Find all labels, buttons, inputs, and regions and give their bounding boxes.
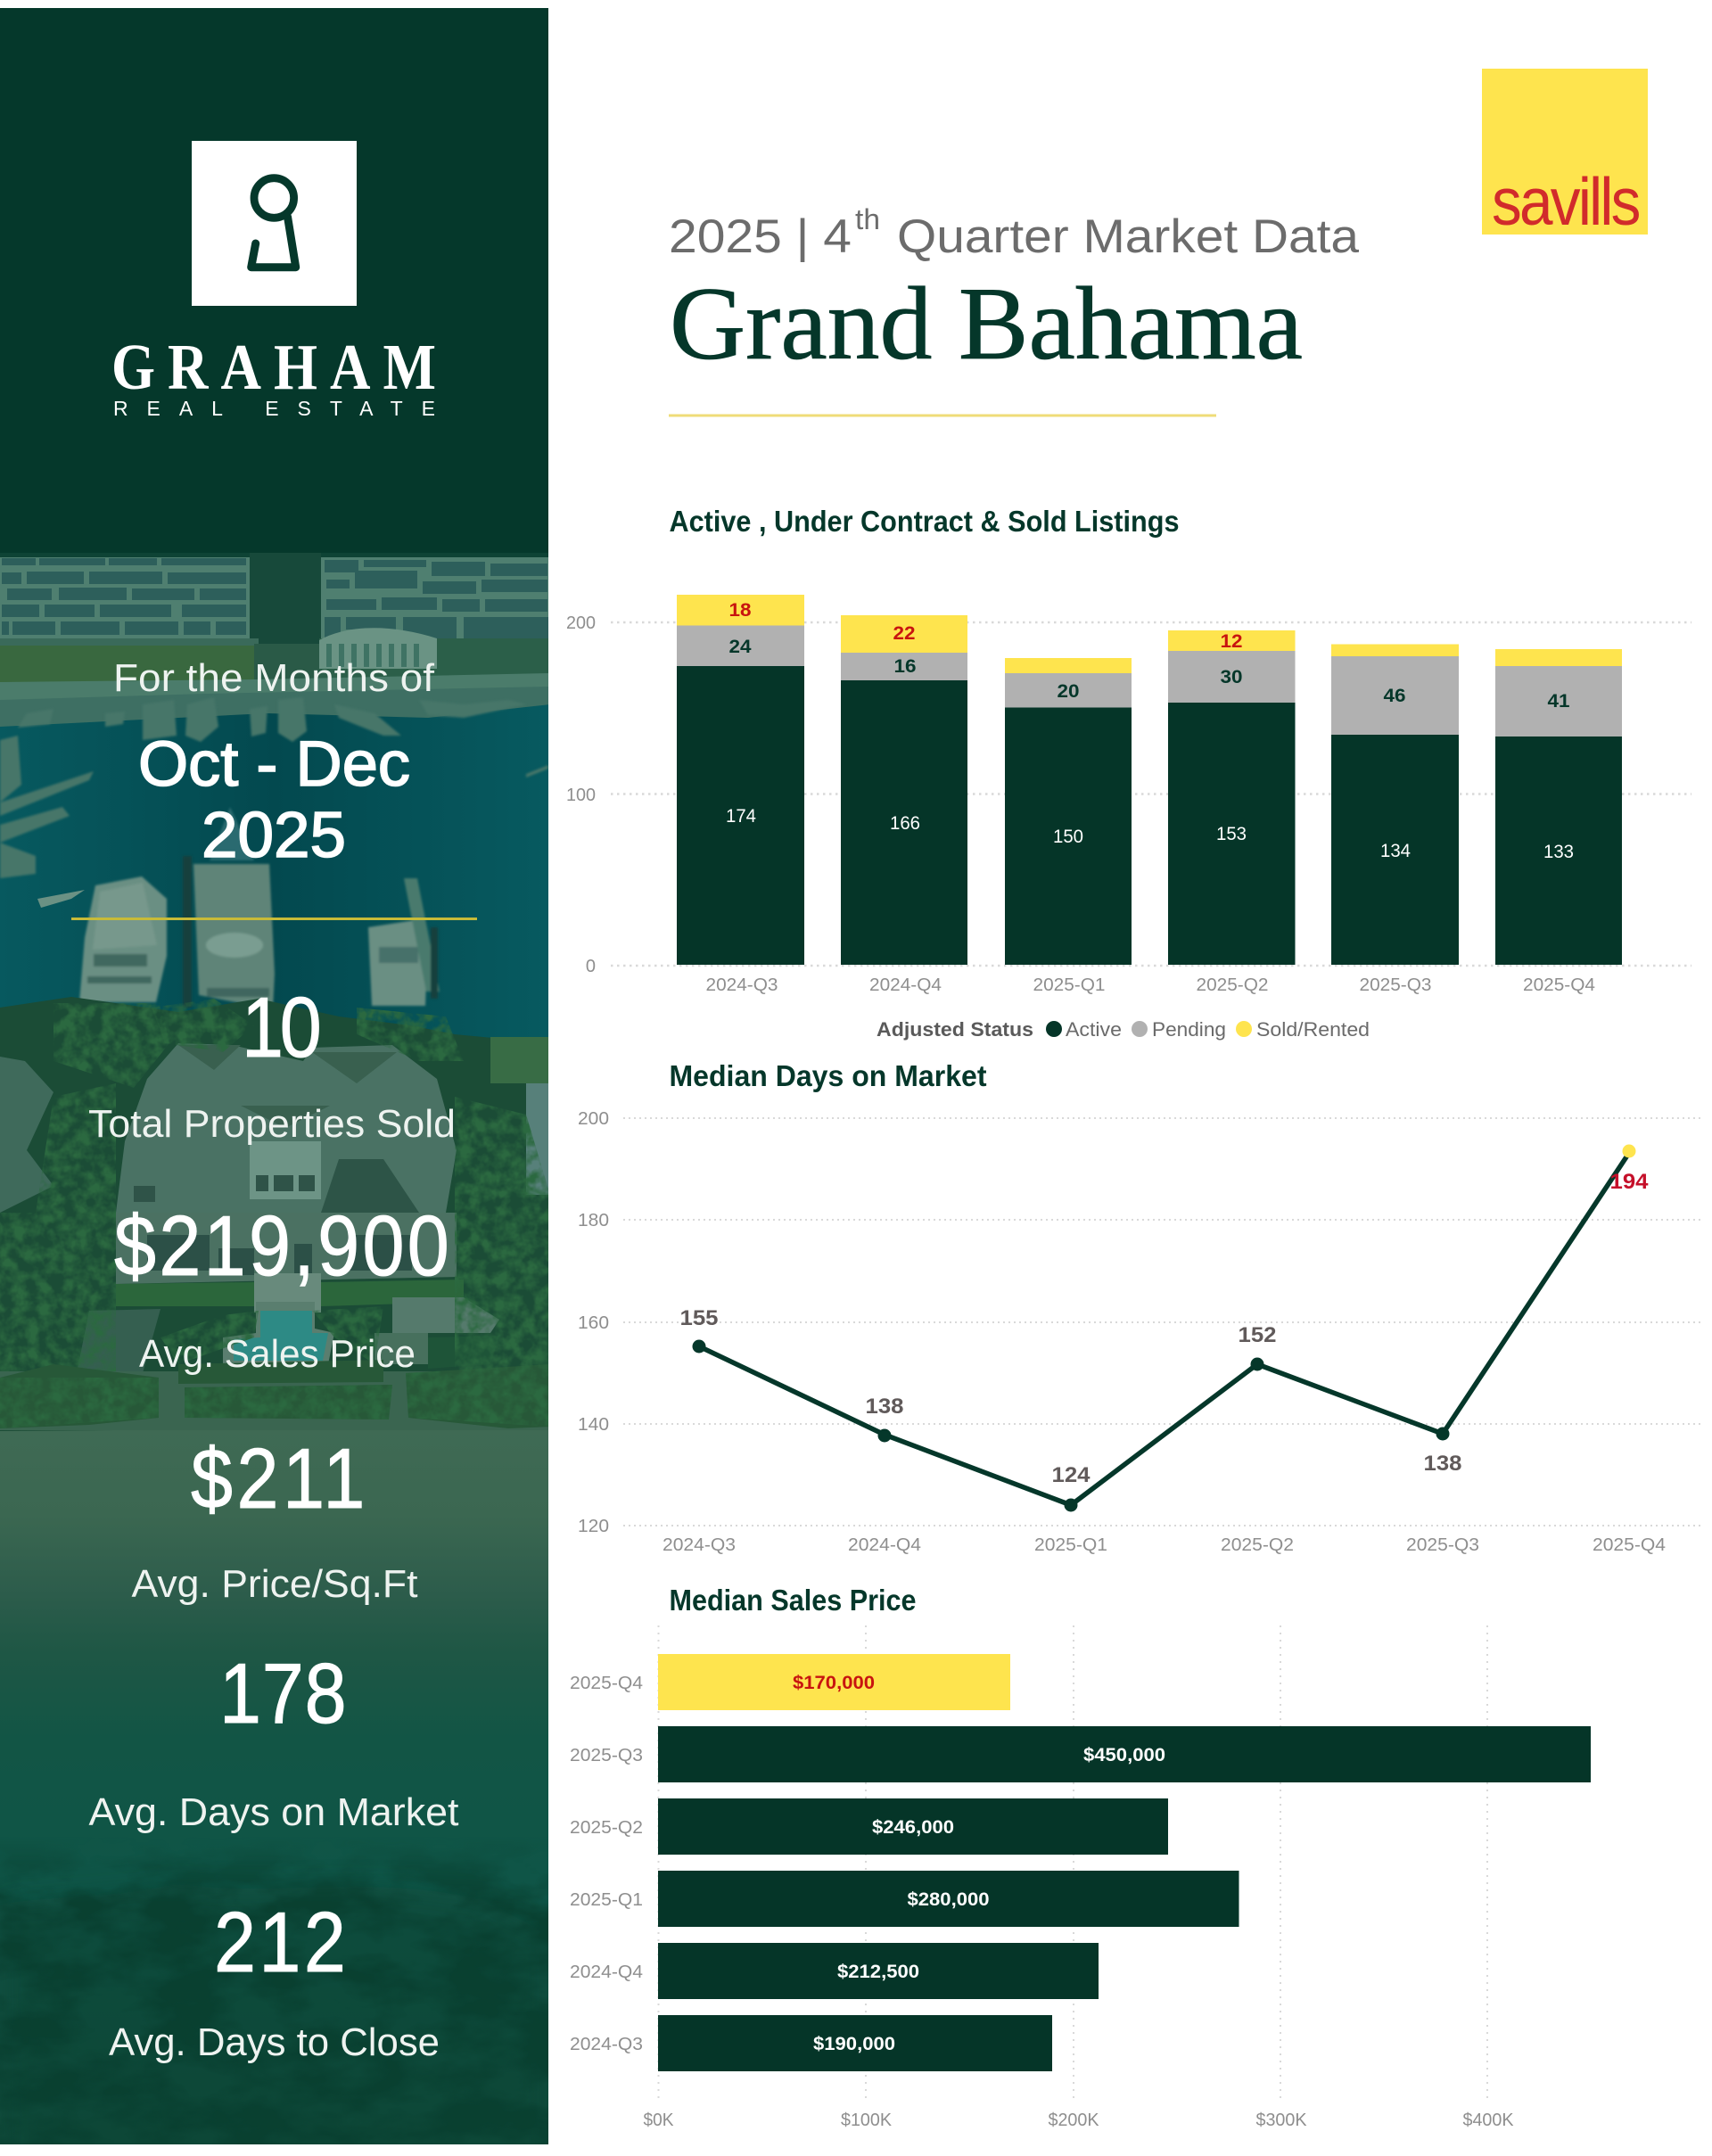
- stat: average days on market: 178: [219, 1646, 347, 1741]
- bar: 2024-Q3: 24: [729, 637, 752, 657]
- y axis labels: 0: [586, 957, 596, 976]
- data labels: 152: [1238, 1323, 1277, 1347]
- data labels: 124: [1052, 1463, 1091, 1487]
- bar: 2025-Q4: 2025-Q4: [570, 1674, 643, 1693]
- bar: 2024-Q4: 2024-Q4: [570, 1963, 643, 1982]
- bar: 2025-Q3: 134: [1380, 841, 1411, 861]
- y axis labels: [578, 1109, 609, 1536]
- period label: Oct - Dec: [138, 729, 410, 800]
- x axis labels: 2025-Q3: [1359, 975, 1432, 995]
- heading: listings chart: Active , Under Contract & Sold Listings: [669, 505, 1179, 538]
- bar: 2025-Q3: $450,000: [1083, 1745, 1165, 1765]
- bar: 2025-Q1: [570, 1871, 1239, 1927]
- x axis labels: 2025-Q2: [1221, 1535, 1294, 1555]
- y axis labels: 120: [578, 1517, 609, 1536]
- legend: [877, 1018, 1370, 1041]
- data labels: 155: [679, 1306, 719, 1330]
- stat: total properties sold: 10: [242, 980, 322, 1075]
- x axis labels: [663, 1535, 1666, 1555]
- bar: 2025-Q3: [1331, 644, 1459, 965]
- period label: 2025: [202, 800, 346, 871]
- line chart: median days on market: [578, 1109, 1702, 1555]
- stacked bar chart: listings: [566, 595, 1691, 1041]
- logo header block: [0, 8, 548, 553]
- bar: 2025-Q1: 150: [1053, 827, 1083, 847]
- stat: average sales price: [114, 1198, 449, 1376]
- y axis labels: 100: [566, 786, 596, 805]
- stat: average price per square foot: $211: [191, 1431, 365, 1526]
- stat: total properties sold: [88, 980, 456, 1146]
- page title: Quarter Market Data: [897, 210, 1360, 263]
- bar: 2025-Q1: 20: [1058, 681, 1079, 702]
- bar: 2025-Q1: 2025-Q1: [570, 1890, 643, 1910]
- bar: 2025-Q2: 30: [1220, 667, 1243, 687]
- yachts: [79, 807, 440, 1009]
- legend: Sold/Rented: [1256, 1018, 1370, 1041]
- bar: 2025-Q4: $170,000: [793, 1673, 875, 1693]
- location heading: Grand Bahama: [670, 267, 1303, 382]
- x axis labels: $100K: [841, 2111, 893, 2130]
- bar: 2025-Q2: $246,000: [872, 1817, 954, 1838]
- stat: average sales price: $219,900: [114, 1198, 449, 1294]
- x axis labels: $400K: [1462, 2111, 1514, 2130]
- x axis labels: $200K: [1049, 2111, 1099, 2130]
- stat: average price per square foot: Avg. Price/Sq.Ft: [132, 1562, 418, 1606]
- x axis labels: 2024-Q3: [706, 975, 778, 995]
- stat: average days to close: [109, 1895, 440, 2064]
- sea floor shading: [71, 1899, 466, 1938]
- bar: 2025-Q3: [570, 1726, 1591, 1782]
- x axis labels: 2024-Q4: [848, 1535, 921, 1555]
- bar: 2024-Q4: 22: [893, 623, 915, 644]
- period label: [113, 656, 435, 871]
- bar: 2024-Q3: [570, 2015, 1052, 2071]
- page title: [669, 203, 1360, 263]
- page title: 2025 | 4: [669, 210, 852, 263]
- trees and houses: [0, 997, 550, 1431]
- bar: 2024-Q4: $212,500: [837, 1962, 919, 1982]
- x axis labels: [644, 2111, 1514, 2130]
- horizontal bar chart: median sales price: [570, 1625, 1591, 2130]
- bar: 2025-Q2: 12: [1220, 631, 1243, 652]
- bar: 2024-Q4: 166: [890, 813, 920, 834]
- bar: 2025-Q4: 41: [1548, 691, 1570, 712]
- bar: 2024-Q3: [677, 595, 804, 965]
- logo mark tile: [192, 141, 357, 306]
- beach hedges: [0, 1371, 494, 1430]
- x axis labels: $0K: [644, 2111, 674, 2130]
- bar: 2025-Q3: 2025-Q3: [570, 1746, 643, 1765]
- bar: 2024-Q3: 2024-Q3: [570, 2035, 643, 2054]
- bar: 2025-Q4: 133: [1543, 842, 1574, 862]
- legend: Active: [1066, 1018, 1122, 1041]
- title gold divider: [669, 414, 1216, 417]
- bar: 2025-Q4: [1495, 649, 1622, 965]
- savills logo: [1482, 69, 1648, 240]
- bar: 2025-Q2: 153: [1216, 824, 1247, 844]
- bar: 2025-Q3: 46: [1384, 686, 1405, 706]
- y axis labels: 200: [566, 613, 596, 633]
- bar: 2025-Q2: [1168, 630, 1295, 965]
- data labels: 194: [1610, 1170, 1649, 1194]
- bar: 2024-Q4: 16: [893, 656, 917, 677]
- savills logo: savills: [1492, 165, 1641, 240]
- bar: 2024-Q3: 18: [729, 600, 752, 621]
- legend: Pending: [1152, 1018, 1226, 1041]
- x axis labels: 2025-Q3: [1406, 1535, 1479, 1555]
- sidebar aerial photo: [0, 553, 550, 2156]
- period label: For the Months of: [113, 656, 435, 700]
- x axis labels: 2025-Q4: [1523, 975, 1595, 995]
- heading: sales price chart: Median Sales Price: [669, 1584, 917, 1617]
- page title: th: [855, 203, 880, 235]
- stat: average days to close: Avg. Days to Close: [109, 2020, 440, 2064]
- logo wordmark: GRAHAM: [111, 331, 436, 403]
- y axis labels: [566, 613, 596, 976]
- data labels: [679, 1170, 1649, 1487]
- y axis labels: 140: [578, 1415, 609, 1435]
- x axis labels: 2025-Q1: [1033, 975, 1106, 995]
- data labels: 138: [1423, 1452, 1462, 1476]
- sidebar gold divider: [71, 918, 477, 920]
- bar: 2024-Q4: [570, 1943, 1099, 1999]
- x axis labels: $300K: [1255, 2111, 1307, 2130]
- legend: Adjusted Status: [877, 1018, 1033, 1041]
- bar: 2025-Q1: [1005, 658, 1132, 965]
- x axis labels: 2025-Q1: [1034, 1535, 1107, 1555]
- stat: average days to close: 212: [214, 1895, 346, 1990]
- logo wordmark: REAL ESTATE: [113, 397, 435, 420]
- marina boats row: [0, 697, 548, 878]
- stat: average price per square foot: [132, 1431, 418, 1606]
- bar: 2025-Q4: [570, 1654, 1010, 1710]
- stat: average days on market: [89, 1646, 458, 1834]
- right-hand waterfront gardens: [319, 638, 548, 678]
- bar: 2024-Q3: $190,000: [813, 2034, 895, 2054]
- y axis labels: 200: [578, 1109, 609, 1129]
- heading: days on market chart: Median Days on Market: [669, 1059, 986, 1092]
- stat: average sales price: Avg. Sales Price: [139, 1332, 416, 1376]
- x axis labels: [706, 975, 1595, 995]
- x axis labels: 2025-Q4: [1593, 1535, 1666, 1555]
- data points: [692, 1145, 1635, 1512]
- x axis labels: 2025-Q2: [1197, 975, 1268, 995]
- stat: average days on market: Avg. Days on Market: [89, 1790, 458, 1834]
- x axis labels: 2024-Q3: [663, 1535, 736, 1555]
- bar: 2024-Q3: 174: [726, 806, 756, 827]
- bar: 2024-Q4: [841, 615, 967, 965]
- data labels: 138: [865, 1395, 904, 1419]
- trend line: [699, 1153, 1629, 1505]
- bar: 2025-Q1: $280,000: [908, 1889, 990, 1910]
- bar: 2025-Q2: [570, 1798, 1168, 1855]
- y axis labels: 180: [578, 1211, 609, 1230]
- x axis labels: 2024-Q4: [869, 975, 942, 995]
- stat: total properties sold: Total Properties Sold: [88, 1102, 456, 1146]
- bar: 2025-Q2: 2025-Q2: [570, 1818, 643, 1838]
- y axis labels: 160: [578, 1313, 609, 1333]
- sidebar panel: [0, 8, 550, 2156]
